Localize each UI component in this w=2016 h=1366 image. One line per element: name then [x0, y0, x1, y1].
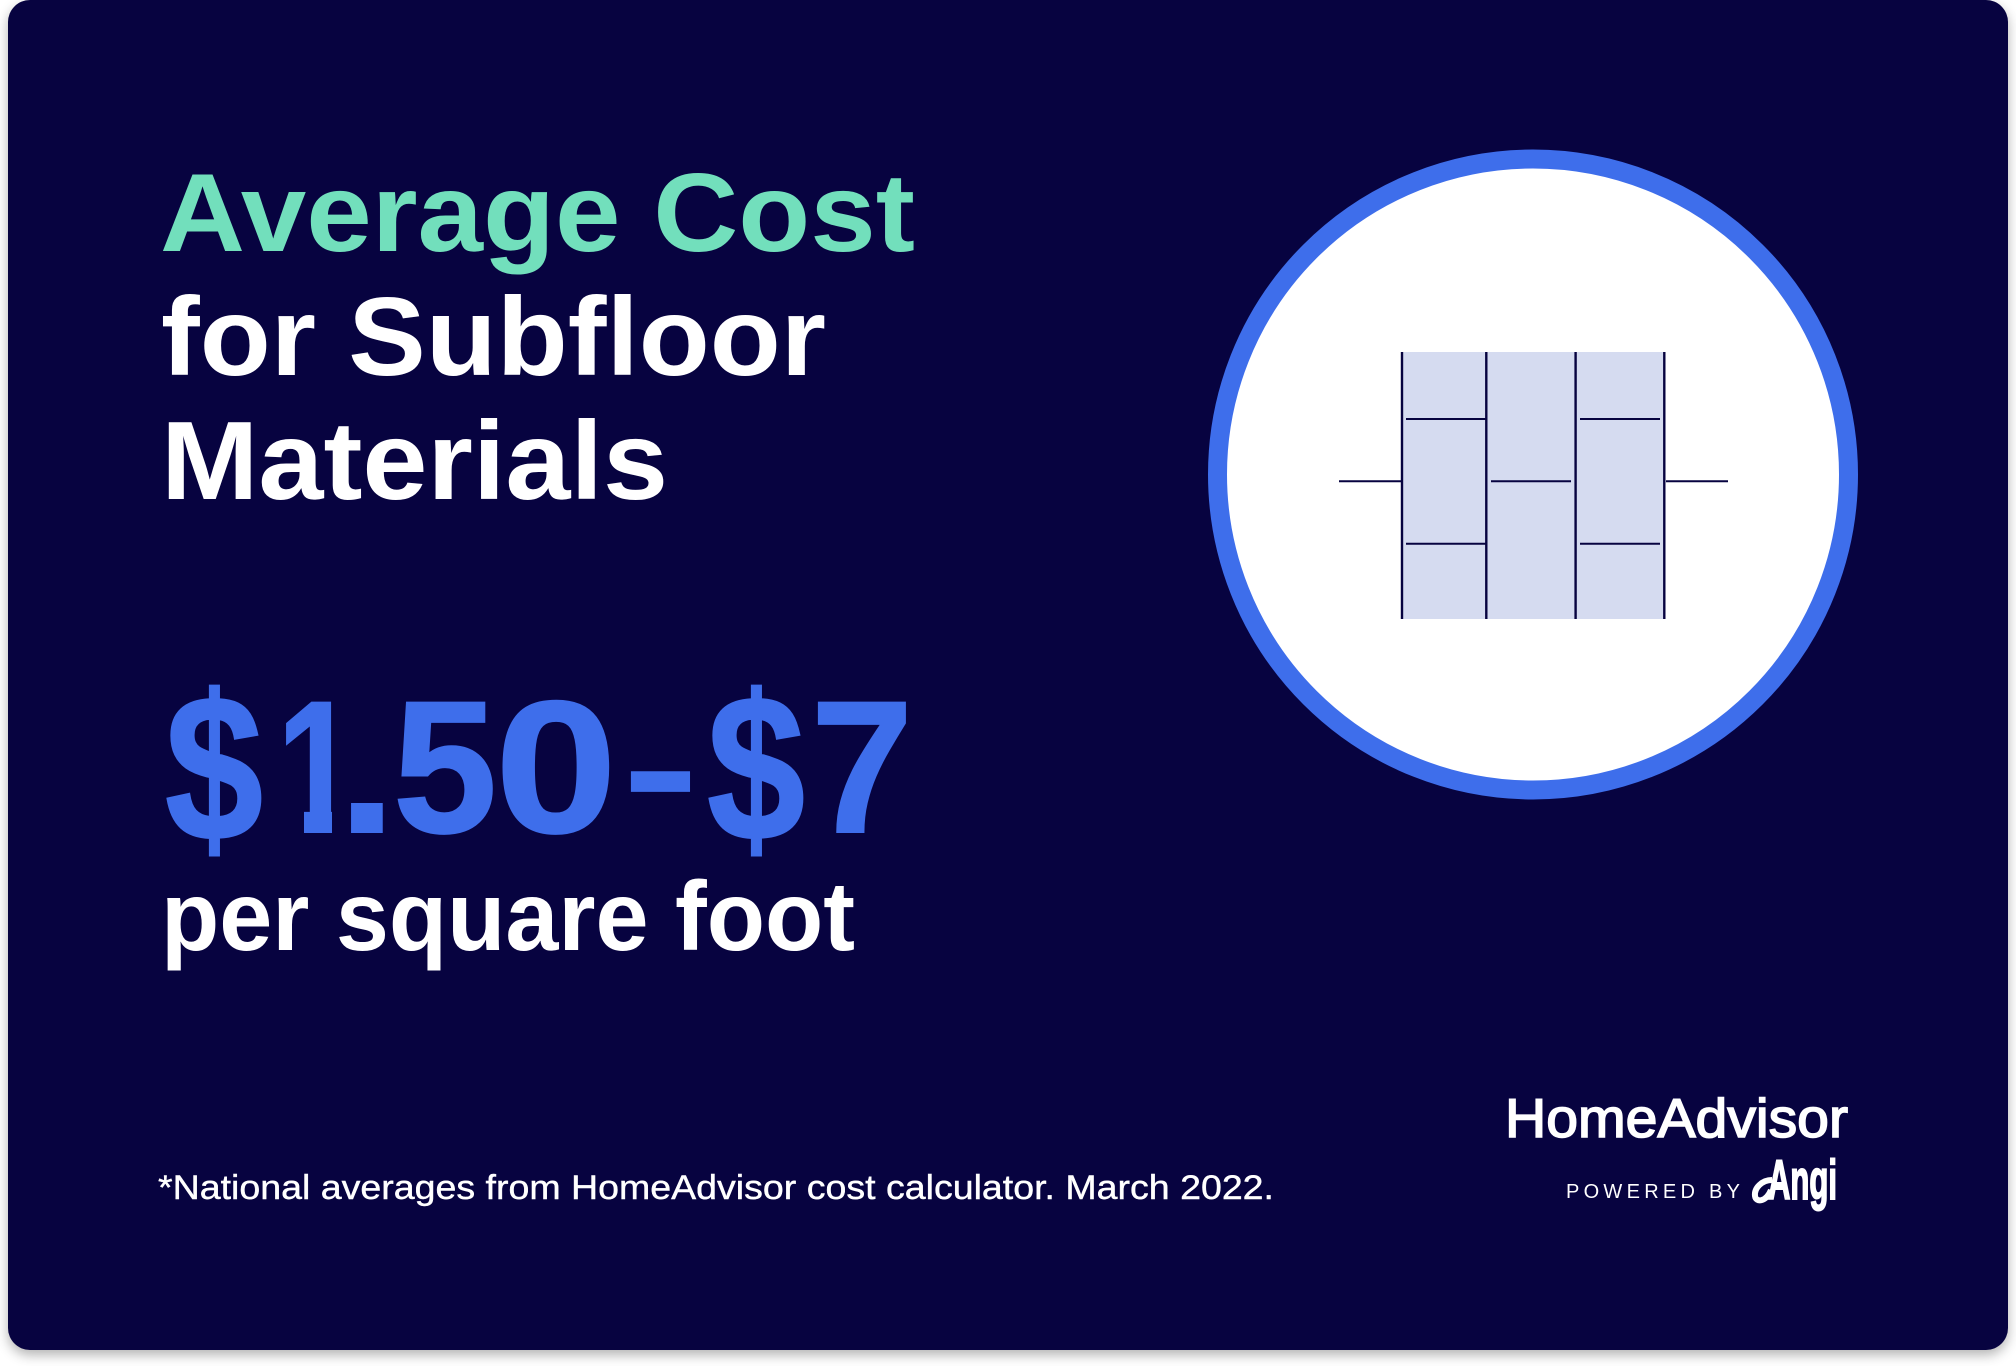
title line: Materials: Materials — [161, 399, 668, 523]
price range: – — [628, 662, 693, 872]
logo wordmark: Angi: Angi — [1768, 1148, 1837, 1211]
subfloor panels fill — [1402, 352, 1665, 619]
subfloor panel lines — [1339, 352, 1728, 619]
infographic content — [158, 150, 1858, 1212]
title — [160, 151, 915, 523]
price range: $ — [707, 653, 805, 885]
title line: Average Cost: Average Cost — [160, 151, 915, 275]
logo: HomeAdvisor powered by Angi — [1505, 1087, 1848, 1211]
logo wordmark: Angi — [1755, 1148, 1837, 1211]
price range: 7 — [811, 662, 913, 872]
title line: for Subfloor: for Subfloor — [161, 275, 826, 399]
icon circle — [1218, 159, 1848, 790]
price range: $ — [165, 653, 263, 885]
logo tagline: powered by: POWERED BY — [1566, 1181, 1740, 1203]
price unit: per square foot — [161, 861, 855, 971]
price range: . — [338, 662, 396, 872]
price range: 0 — [495, 662, 617, 872]
logo wordmark: HomeAdvisor: HomeAdvisor — [1505, 1087, 1848, 1149]
price range: 1 — [277, 662, 357, 872]
price range: 5 — [393, 662, 497, 872]
price range — [166, 684, 906, 856]
icon: subfloor panels in circle — [1218, 159, 1848, 790]
footnote: *National averages from HomeAdvisor cost calculator. March 2022. — [158, 1169, 1274, 1207]
